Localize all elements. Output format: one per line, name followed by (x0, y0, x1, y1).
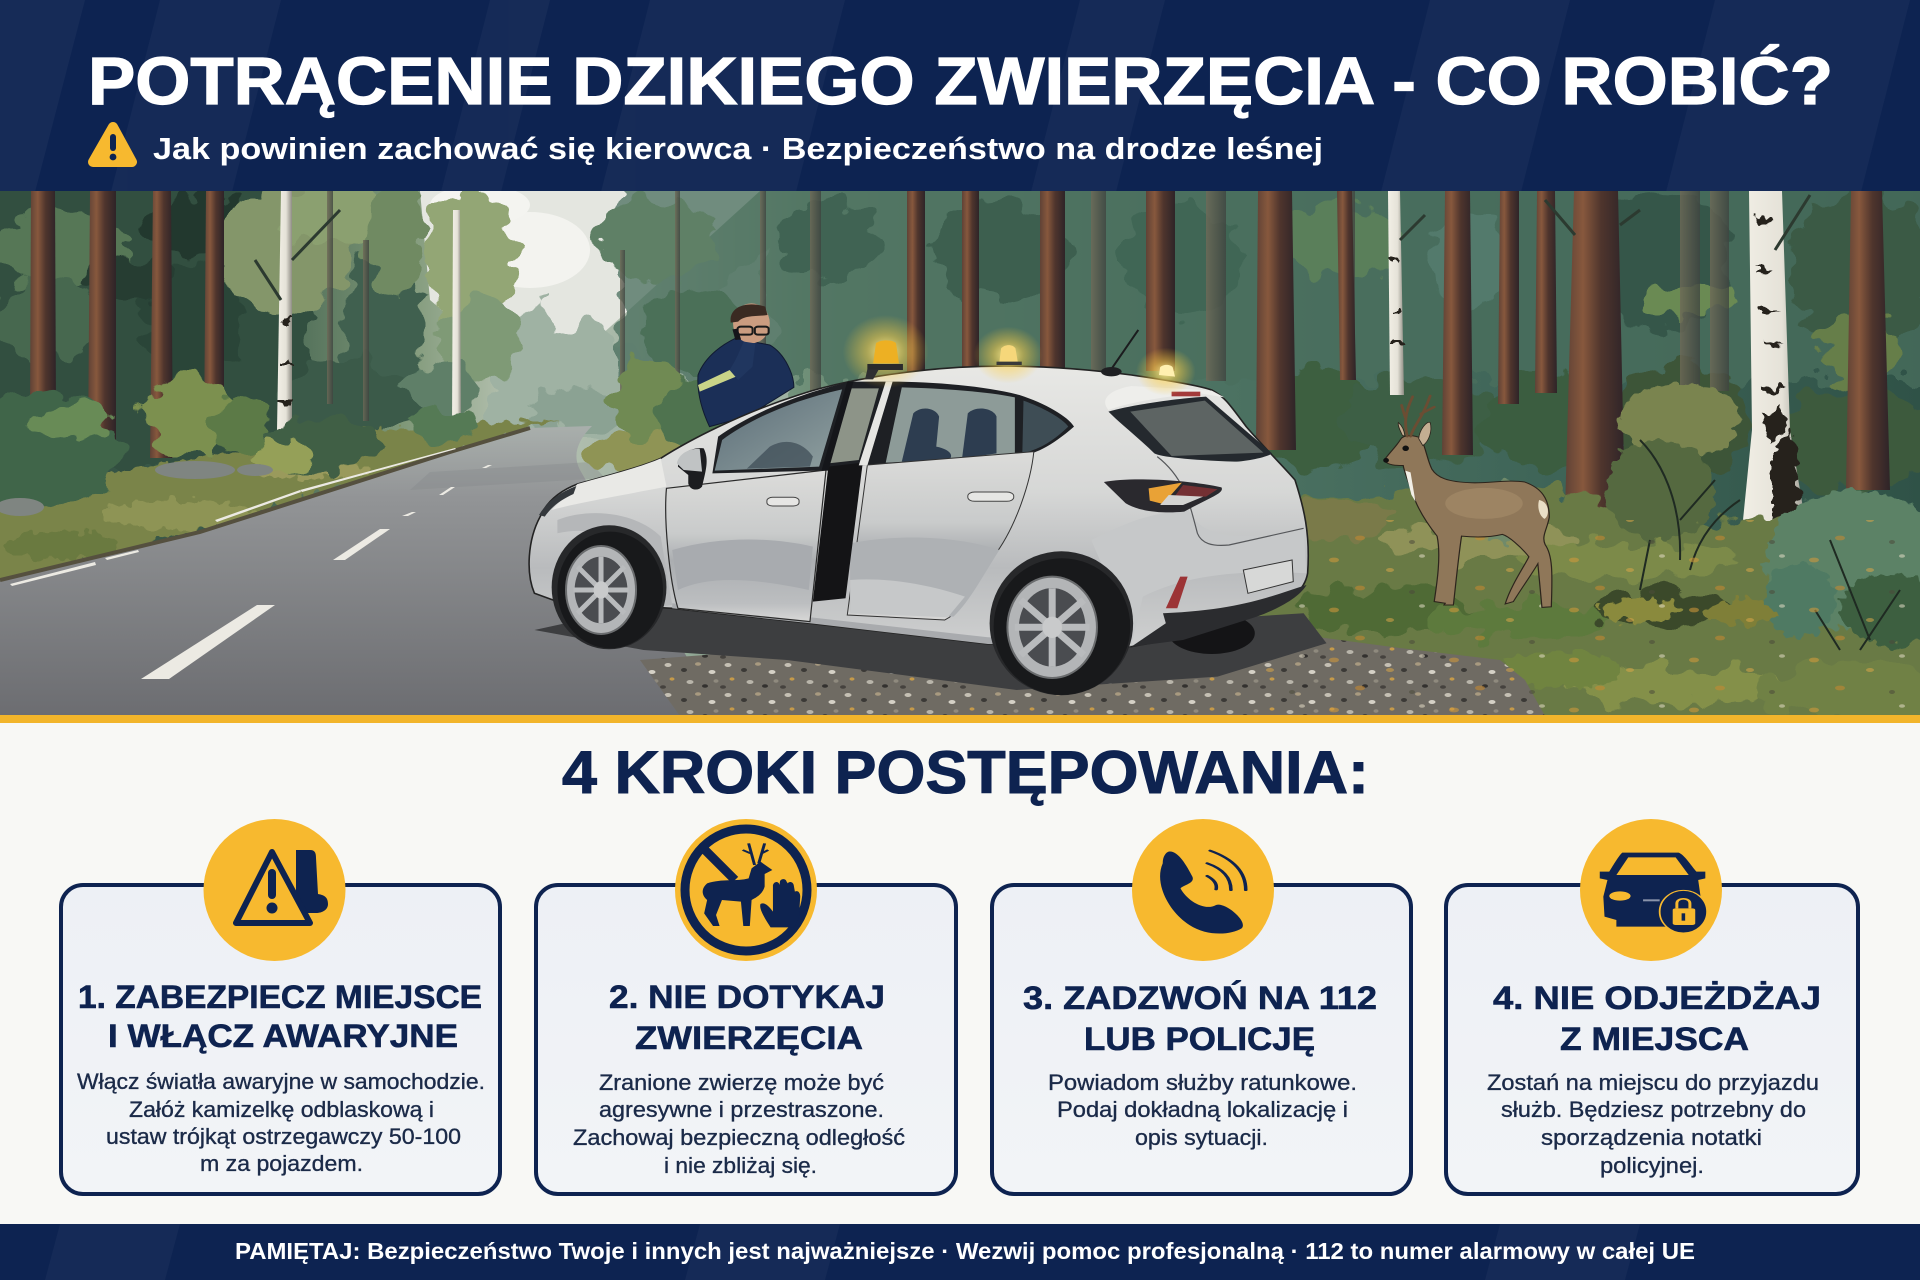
step 3 text: Podaj dokładną lokalizację i (1057, 1097, 1348, 1122)
step 1 text: Załóż kamizelkę odblaskową i (129, 1097, 434, 1122)
door pillar (821, 382, 854, 471)
header banner (0, 0, 1920, 192)
mirror (678, 448, 707, 490)
front side glass (715, 389, 842, 471)
icon: do not touch deer (675, 819, 817, 961)
footer banner (0, 1224, 1920, 1280)
panel: step 1 (61, 819, 500, 1194)
road markings (10, 448, 492, 679)
icon: warning triangle and vest (204, 819, 346, 961)
icon: phone (1132, 819, 1274, 961)
shrubs right (1474, 382, 1920, 688)
gravel shoulder (640, 520, 1920, 716)
step 2 text: agresywne i przestraszone. (599, 1097, 884, 1122)
door handles (767, 497, 799, 506)
car (529, 315, 1327, 695)
rear quarter shading (1098, 510, 1306, 586)
car body (529, 366, 1308, 647)
window surround (712, 382, 1074, 473)
step 2 title: 2. NIE DOTYKAJ (609, 979, 885, 1015)
sill (672, 603, 1131, 647)
antenna (1108, 330, 1138, 373)
left bushes (0, 375, 480, 510)
shrub twigs (1640, 440, 1900, 650)
number plate (1243, 560, 1293, 593)
subtitle: Jak powinien zachować się kierowca · Bezpieczeństwo na drodze leśnej (153, 131, 1323, 166)
rear bumper (1131, 585, 1306, 647)
headlight (539, 486, 576, 517)
step 2 text: Zranione zwierzę może być (599, 1070, 884, 1095)
rear door (847, 452, 1034, 620)
seats (902, 408, 951, 462)
step 1 title: I WŁĄCZ AWARYJNE (108, 1018, 458, 1054)
step 2 title: ZWIERZĘCIA (635, 1020, 863, 1056)
pine trunks (30, 191, 1890, 512)
undergrowth behind trunks (1260, 360, 1920, 490)
yellow divider (0, 715, 1920, 723)
step 1 text: m za pojazdem. (200, 1151, 363, 1176)
rocks (0, 461, 273, 516)
icon: locked car (1580, 819, 1722, 961)
branches (255, 195, 1810, 300)
sky (420, 191, 760, 334)
front fender shading (557, 513, 672, 607)
panel: step 2 (536, 819, 956, 1194)
step 1 title: 1. ZABEZPIECZ MIEJSCE (78, 979, 482, 1015)
left dark forest canopy (0, 170, 518, 470)
step 4 text: Zostań na miejscu do przyjazdu (1487, 1070, 1819, 1095)
step 4 text: służb. Będziesz potrzebny do (1501, 1097, 1806, 1122)
forest floor right (1258, 480, 1920, 715)
step 3 title: 3. ZADZWOŃ NA 112 (1023, 980, 1377, 1016)
tail lamp (1104, 479, 1222, 512)
door opening (813, 463, 863, 602)
car shadow (534, 600, 1327, 690)
step 2 text: i nie zbliżaj się. (664, 1153, 817, 1178)
deer (1383, 396, 1552, 607)
step 4 title: 4. NIE ODJEŻDŻAJ (1493, 980, 1821, 1016)
step 4 text: sporządzenia notatki (1541, 1125, 1762, 1150)
step 4 text: policyjnej. (1600, 1153, 1704, 1178)
panel: step 4 (1446, 819, 1858, 1194)
icon: warning triangle (93, 127, 132, 162)
misty far treeline (490, 260, 800, 440)
far rear tyre (1172, 620, 1255, 654)
birch trunks (277, 191, 1810, 550)
illustration: forest road scene (0, 191, 1920, 715)
step 1 text: Włącz światła awaryjne w samochodzie. (77, 1069, 485, 1094)
rear window (1108, 397, 1272, 462)
step 3 text: opis sytuacji. (1135, 1125, 1268, 1150)
section heading: 4 KROKI POSTĘPOWANIA: (562, 739, 1369, 806)
grass verge left (0, 420, 560, 590)
beacon lights (843, 315, 1196, 396)
rear wheel (990, 551, 1133, 695)
rear side glass (886, 387, 1015, 463)
step 3 title: LUB POLICJĘ (1084, 1021, 1315, 1057)
step 4 title: Z MIEJSCA (1560, 1021, 1749, 1057)
step 2 text: Zachowaj bezpieczną odległość (573, 1125, 905, 1150)
door gap view (828, 388, 879, 463)
step 3 text: Powiadom służby ratunkowe. (1048, 1070, 1357, 1095)
verge and bushes behind car (585, 362, 745, 477)
hatch line (1157, 457, 1304, 545)
rear reflector (1166, 577, 1188, 608)
road (0, 426, 720, 715)
footer text: PAMIĘTAJ: Bezpieczeństwo Twoje i innych jest najważniejsze · Wezwij pomoc profesjonalną · 112 to numer alarmowy w całej UE (235, 1238, 1695, 1264)
step 1 text: ustaw trójkąt ostrzegawczy 50-100 (106, 1124, 461, 1149)
title: POTRĄCENIE DZIKIEGO ZWIERZĘCIA - CO ROBIĆ? (88, 44, 1833, 119)
distant trunks (327, 191, 1729, 431)
right forest canopy (600, 170, 1920, 385)
quarter glass (1022, 401, 1068, 453)
panel: step 3 (992, 819, 1411, 1194)
front wheel (552, 525, 666, 649)
open door (666, 470, 826, 622)
man on phone (698, 303, 794, 427)
